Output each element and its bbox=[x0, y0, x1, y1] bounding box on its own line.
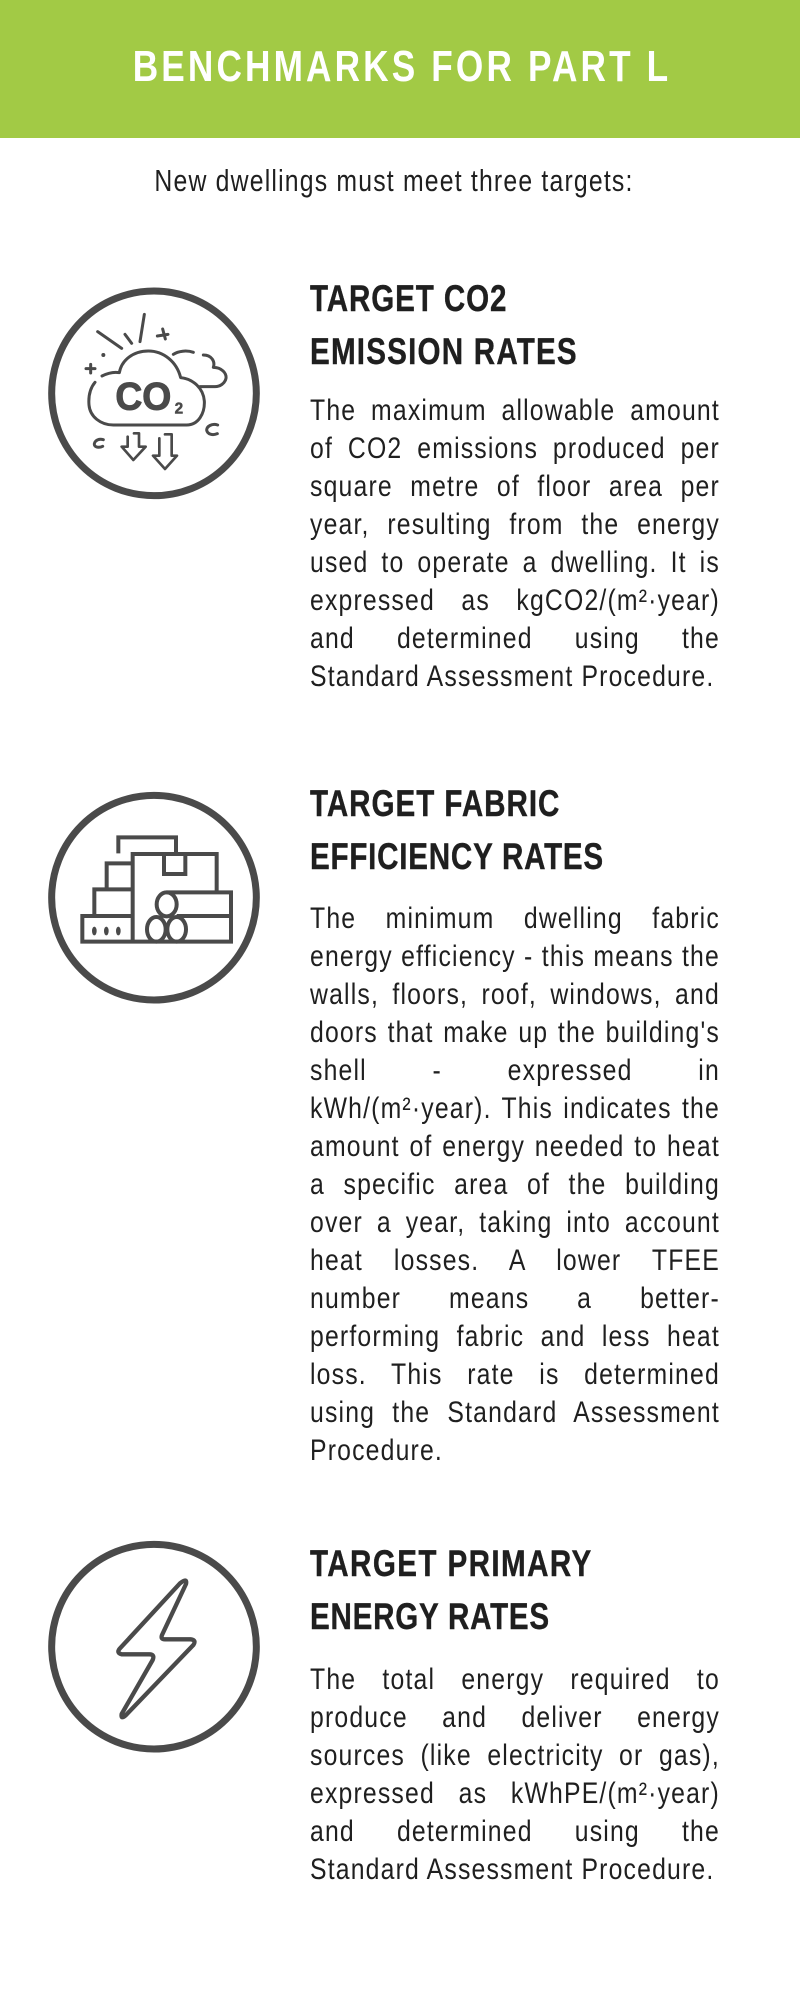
heading: ENERGY RATES bbox=[310, 1596, 550, 1637]
body text: expressed as kWhPE/(m²·year) bbox=[310, 1777, 720, 1810]
body text: Standard Assessment Procedure. bbox=[310, 660, 714, 693]
heading: EMISSION RATES bbox=[310, 331, 578, 372]
body text: energy efficiency - this means the bbox=[310, 940, 720, 973]
body text: shell - expressed in bbox=[310, 1054, 720, 1087]
body text: and determined using the bbox=[310, 1815, 720, 1848]
body text: Standard Assessment Procedure. bbox=[310, 1853, 714, 1886]
body text: The total energy required to bbox=[310, 1663, 720, 1696]
panel: target CO2 emission rates bbox=[48, 278, 720, 693]
body text: used to operate a dwelling. It is bbox=[310, 546, 720, 579]
body text: a specific area of the building bbox=[310, 1168, 720, 1201]
panel: target primary energy rates bbox=[48, 1540, 720, 1886]
body text bbox=[310, 394, 720, 693]
body text: loss. This rate is determined bbox=[310, 1358, 720, 1391]
icon: lightning bolt bbox=[48, 1540, 260, 1752]
body text bbox=[310, 1663, 720, 1886]
heading bbox=[310, 278, 578, 372]
heading bbox=[310, 783, 604, 877]
icon: CO2 cloud: 2 bbox=[175, 400, 183, 417]
title: BENCHMARKS FOR PART L bbox=[133, 42, 671, 91]
body text: over a year, taking into account bbox=[310, 1206, 720, 1239]
body text: walls, floors, roof, windows, and bbox=[310, 978, 720, 1011]
body text: sources (like electricity or gas), bbox=[310, 1739, 720, 1772]
body text: year, resulting from the energy bbox=[310, 508, 720, 541]
body text: of CO2 emissions produced per bbox=[310, 432, 720, 465]
body text bbox=[310, 902, 720, 1467]
heading bbox=[310, 1543, 593, 1637]
heading: EFFICIENCY RATES bbox=[310, 836, 604, 877]
body text: Procedure. bbox=[310, 1434, 443, 1467]
body text: number means a better- bbox=[310, 1282, 720, 1315]
body text: amount of energy needed to heat bbox=[310, 1130, 720, 1163]
body text: The minimum dwelling fabric bbox=[310, 902, 720, 935]
panel: target fabric efficiency rates bbox=[48, 783, 720, 1467]
body text: performing fabric and less heat bbox=[310, 1320, 720, 1353]
heading: TARGET FABRIC bbox=[310, 783, 560, 824]
body text: square metre of floor area per bbox=[310, 470, 720, 503]
icon: CO2 cloud bbox=[48, 288, 260, 500]
body text: and determined using the bbox=[310, 622, 720, 655]
heading: TARGET PRIMARY bbox=[310, 1543, 593, 1584]
icon: CO2 cloud: CO bbox=[115, 374, 171, 418]
body text: produce and deliver energy bbox=[310, 1701, 720, 1734]
heading: TARGET CO2 bbox=[310, 278, 507, 319]
body text: kWh/(m²·year). This indicates the bbox=[310, 1092, 720, 1125]
header banner bbox=[0, 0, 800, 138]
body text: using the Standard Assessment bbox=[310, 1396, 720, 1429]
body text: expressed as kgCO2/(m²·year) bbox=[310, 584, 720, 617]
body text: The maximum allowable amount bbox=[310, 394, 720, 427]
body text: heat losses. A lower TFEE bbox=[310, 1244, 720, 1277]
body text: doors that make up the building's bbox=[310, 1016, 720, 1049]
icon: building materials bbox=[48, 792, 260, 1004]
intro line: New dwellings must meet three targets: bbox=[154, 163, 634, 198]
